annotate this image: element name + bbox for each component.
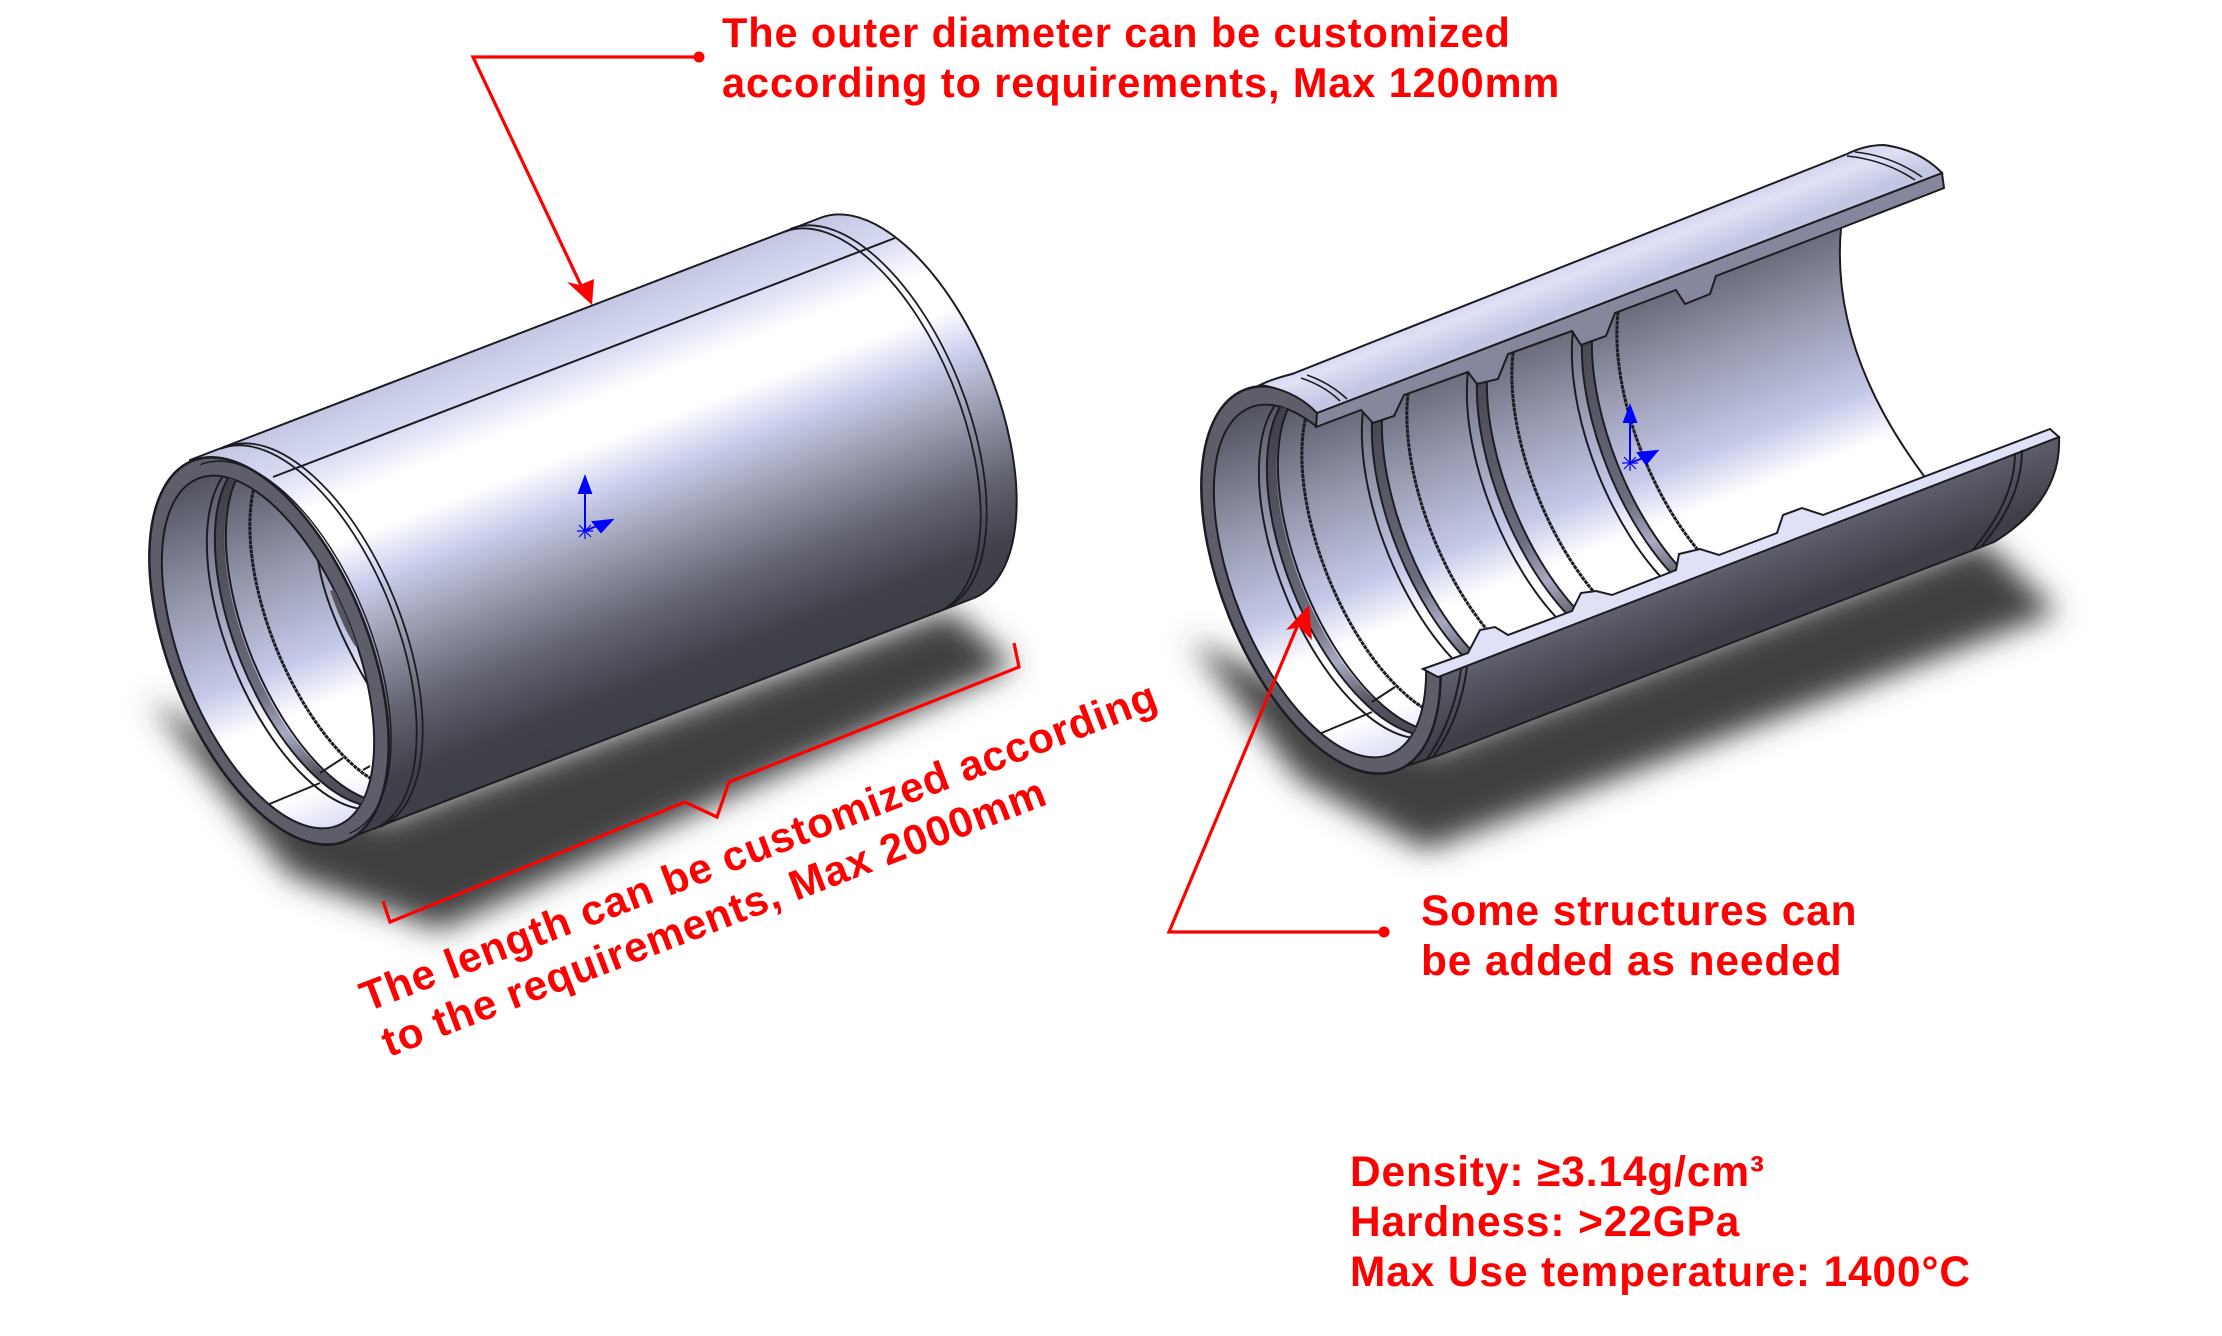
label: structures: be added as needed (1421, 937, 1842, 984)
bore interior (1316, 228, 1924, 669)
left cylinder shadow (150, 610, 1015, 930)
material specifications: Max Use temperature: 1400°C (1350, 1248, 1971, 1295)
right centre axis triad (1622, 406, 1657, 471)
cylinder body (190, 214, 1017, 840)
left cylinder (148, 213, 1018, 846)
outer top surface (1260, 145, 1942, 413)
label: outer diameter: The outer diameter can be customized (722, 9, 1511, 56)
rim inner double line (201, 429, 439, 833)
label: length: to the requirements, Max 2000mm (375, 768, 1053, 1066)
material specifications: Hardness: >22GPa (1350, 1198, 1740, 1245)
inner step rings (206, 477, 370, 810)
left centre axis triad (577, 477, 612, 539)
seam line (273, 238, 895, 477)
front rim and bore lining (1200, 385, 1442, 775)
label: outer diameter: according to requirements, Max 1200mm (722, 59, 1560, 106)
right half-section cylinder (1152, 145, 2059, 807)
label: structures: Some structures can (1421, 887, 1857, 934)
front flange lines (220, 410, 472, 829)
length bracket (383, 643, 1019, 922)
bore (160, 474, 376, 830)
label: length: The length can be customized according (353, 672, 1164, 1020)
back flange lines (784, 192, 1036, 612)
outer lower surface (1400, 437, 2059, 768)
cut wall face, upper (1316, 173, 1944, 427)
right cylinder shadow (1190, 540, 2058, 850)
top flange lines (1301, 152, 1922, 401)
front step rings (1258, 406, 1422, 738)
end flange lines (1427, 450, 2022, 759)
front end rim (100, 424, 438, 878)
material specifications: Density: ≥3.14g/cm³ (1350, 1148, 1765, 1195)
lower cut face (1423, 429, 2059, 677)
interior ring grooves (1360, 312, 1699, 658)
bore back edge (1840, 228, 1924, 476)
leader: outer diameter arrow (473, 52, 704, 305)
leader: structures arrow (1169, 605, 1390, 938)
